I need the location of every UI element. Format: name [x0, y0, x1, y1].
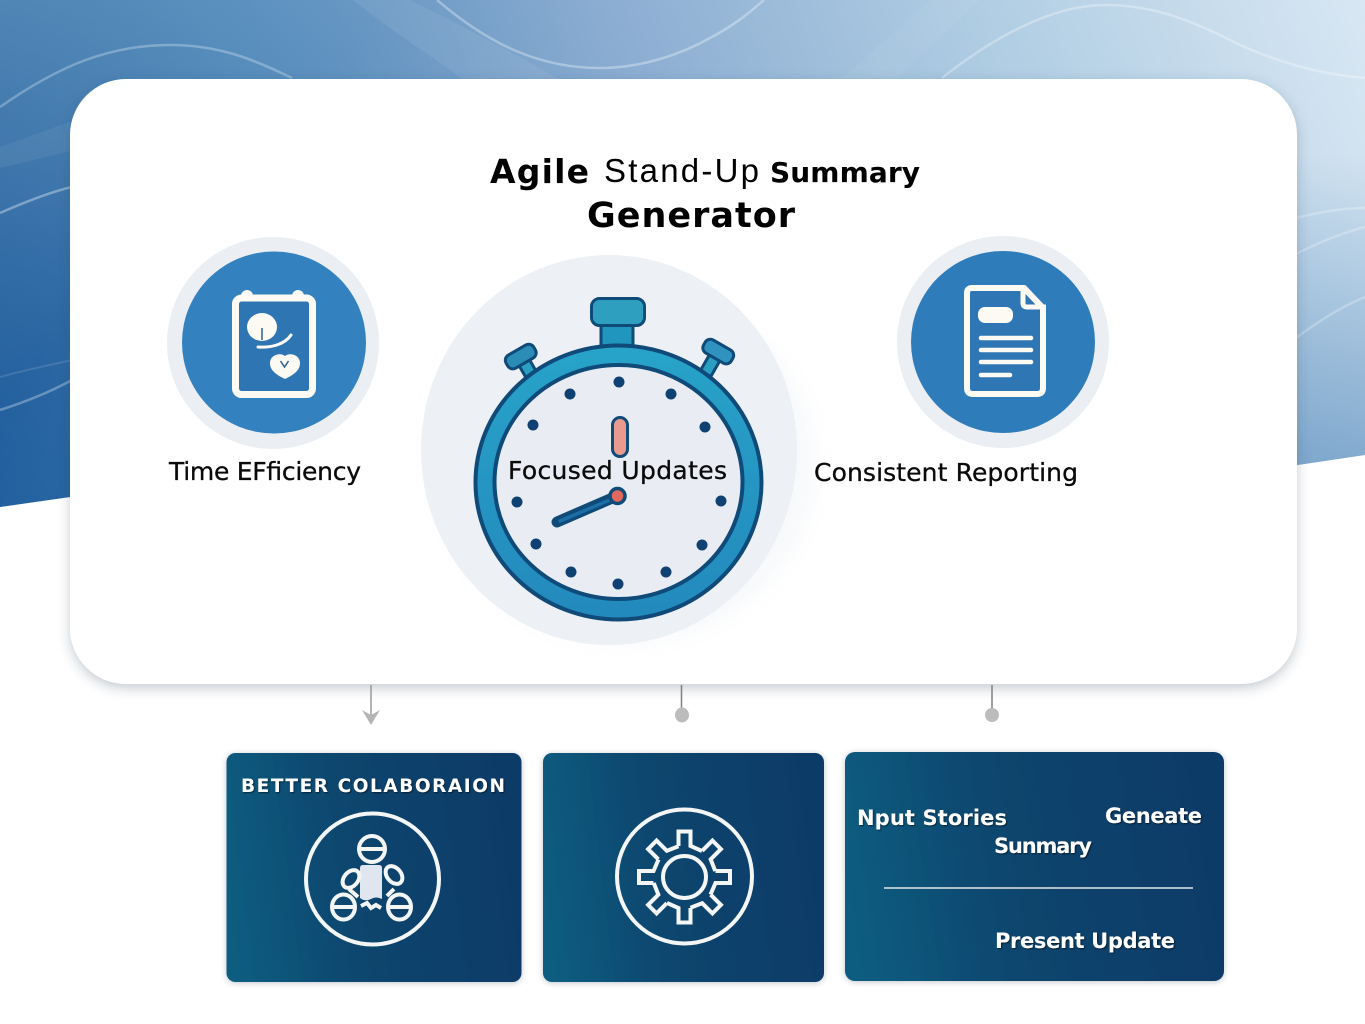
watch ring	[476, 346, 762, 620]
panel: consistent reporting icon	[897, 236, 1109, 448]
connector dot 2	[675, 685, 689, 722]
panel: focused updates stopwatch	[421, 255, 815, 645]
workflow step text: Geneate	[1105, 804, 1202, 828]
icon: team in circle	[306, 814, 439, 944]
clock hand	[557, 496, 617, 522]
workflow step text: Nput Stories	[857, 806, 1007, 830]
title: Agile	[490, 152, 589, 191]
title: Stand-Up	[604, 152, 759, 189]
workflow step text: Present Update	[995, 929, 1175, 953]
divider line	[884, 887, 1193, 889]
label: consistent reporting: Consistent Reporting	[814, 458, 1078, 487]
workflow step text: Sunmary	[994, 834, 1092, 858]
red marker	[612, 418, 628, 456]
connector dot 3	[985, 685, 999, 722]
label: focused updates: Focused Updates	[508, 456, 727, 485]
background: blue wave header	[0, 0, 1365, 507]
hour dots	[512, 376, 726, 590]
title: Summary	[770, 156, 920, 189]
icon: gear in circle	[617, 810, 752, 944]
panel: workflow steps	[845, 752, 1224, 981]
icon: stopwatch	[476, 298, 762, 620]
main white panel	[70, 79, 1297, 684]
title: Generator	[587, 196, 796, 236]
right pusher	[692, 337, 736, 382]
workflow step text	[857, 804, 1202, 953]
left pusher	[503, 342, 547, 387]
heading: better collaboration: BETTER COLABORAION	[241, 776, 505, 797]
label: time efficiency: Time EFficiency	[168, 457, 361, 486]
icon: calendar clipboard	[236, 290, 312, 394]
connector arrow 1	[362, 685, 380, 725]
panel: gear card	[543, 753, 824, 982]
title	[490, 152, 920, 236]
watch face	[494, 365, 742, 599]
crown	[592, 298, 644, 348]
panel: better collaboration	[226, 753, 522, 982]
panel: time efficiency icon	[167, 237, 379, 449]
icon: document	[967, 285, 1046, 394]
